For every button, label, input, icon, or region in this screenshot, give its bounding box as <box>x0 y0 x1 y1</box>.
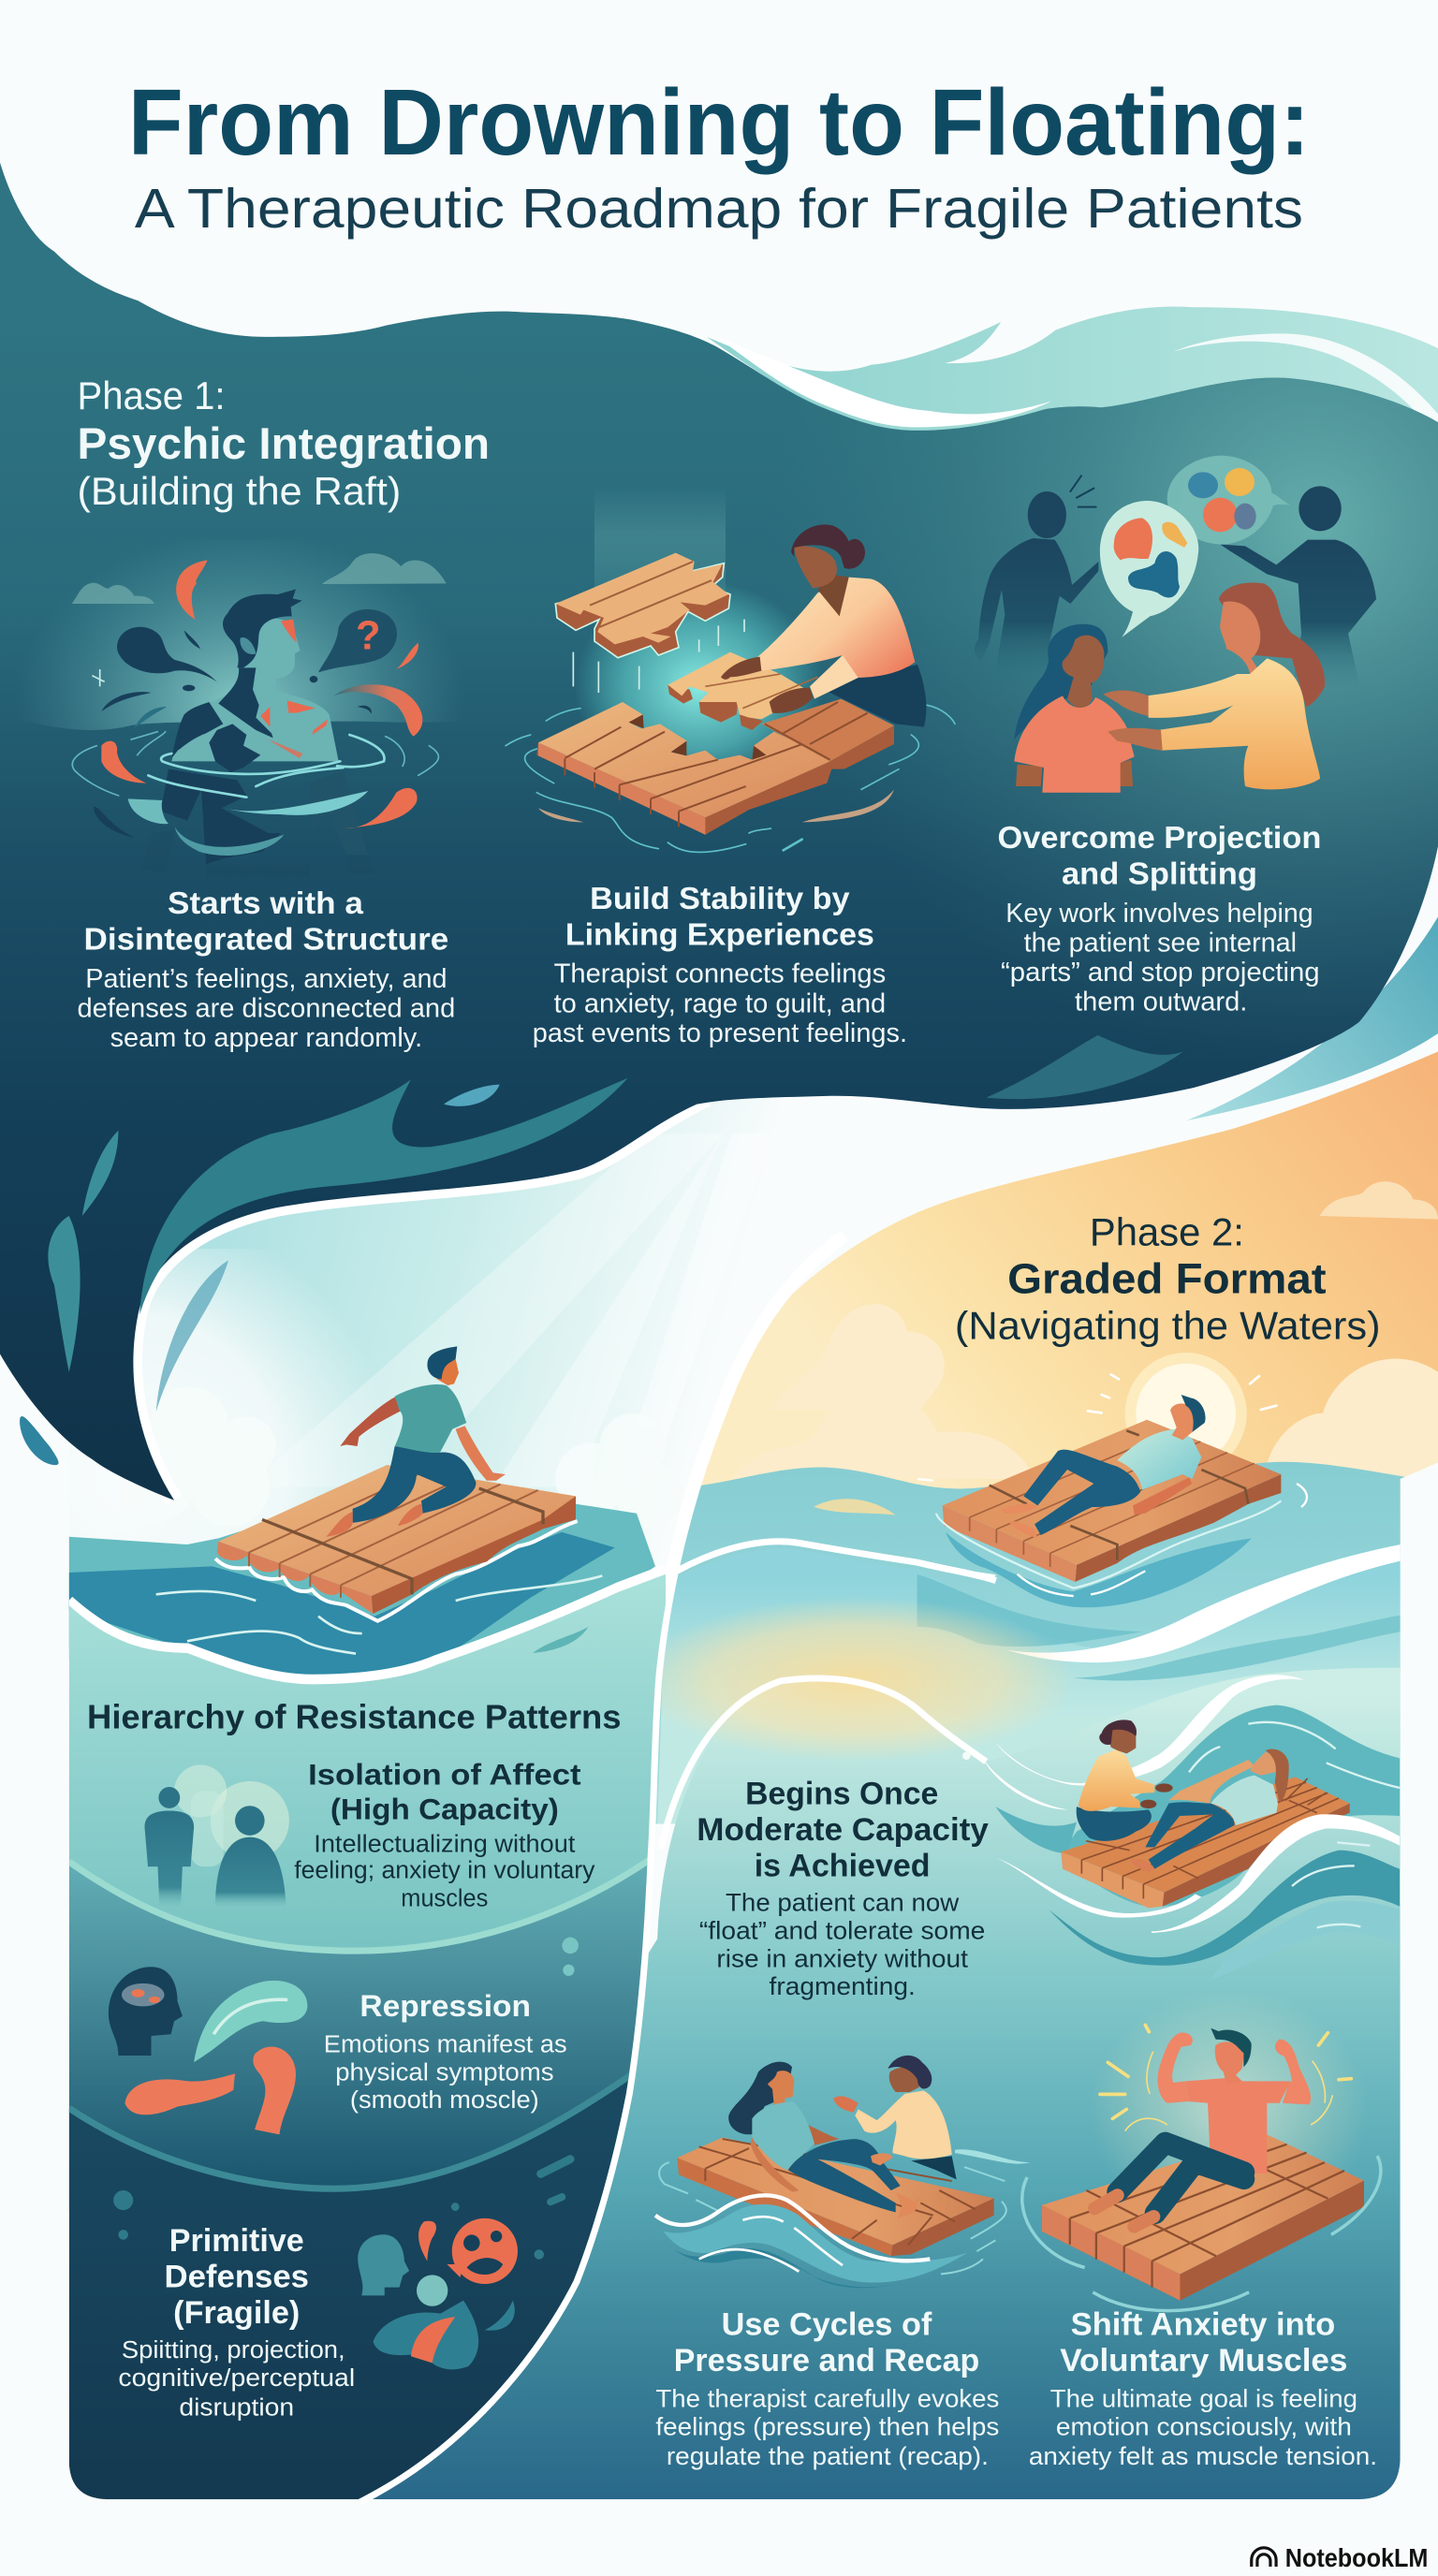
text: cycles of pressure and recap <box>655 2306 999 2470</box>
sound marks <box>1070 476 1096 507</box>
raft front faces <box>217 1542 373 1614</box>
foam <box>936 1500 1281 1588</box>
question bubble <box>318 609 397 672</box>
energy arcs <box>1125 2052 1332 2131</box>
lower white ribbon <box>997 1858 1201 1918</box>
text: begins once moderate capacity: The patient can now <box>726 1888 960 1917</box>
text: cycles of pressure and recap: regulate the patient (recap). <box>667 2441 989 2470</box>
subtitle: A Therapeutic Roadmap for Fragile Patients <box>135 177 1303 240</box>
text: shift anxiety into voluntary muscles <box>1029 2306 1377 2470</box>
tan flecks <box>538 789 894 822</box>
dark blob <box>117 627 217 681</box>
orange shards on shoulder <box>260 700 328 758</box>
left arm <box>340 1397 405 1446</box>
card text: overcome projection: and Splitting <box>1062 856 1257 891</box>
therapist torso <box>1078 1749 1154 1811</box>
divider between columns <box>359 1236 844 2499</box>
icon: fragmented self <box>113 2159 570 2369</box>
right woman top <box>1147 658 1320 789</box>
right silhouette head <box>1299 486 1342 531</box>
text: cycles of pressure and recap: The therapist carefully evokes <box>655 2384 999 2413</box>
card text: disintegrated structure: Patient’s feelings, anxiety, and <box>85 964 447 994</box>
under water torso <box>161 769 281 864</box>
torso <box>757 578 915 686</box>
sparkle <box>92 669 105 686</box>
card text: build stability: Linking Experiences <box>565 917 874 952</box>
lighter teal at the right <box>0 163 1438 1118</box>
blue sky drop <box>156 1260 228 1412</box>
card text: overcome projection: “parts” and stop projecting <box>1001 958 1320 988</box>
orange fragments <box>101 560 422 828</box>
section: isolation of affect: (High Capacity) <box>330 1792 559 1825</box>
feet <box>1000 1504 1037 1538</box>
teal swoosh <box>139 1078 628 1314</box>
right under water arm <box>309 770 368 855</box>
raft top <box>1061 1777 1350 1893</box>
pale crest wave <box>707 307 1438 476</box>
forearm lower <box>810 655 858 699</box>
blue band at right <box>1186 917 1438 1120</box>
sun rays <box>1088 1374 1276 1412</box>
surf in wave <box>1292 1842 1370 1927</box>
plank ends <box>565 759 679 827</box>
trousers <box>353 1446 476 1523</box>
text: cycles of pressure and recap: Pressure and Recap <box>674 2343 979 2378</box>
raft top <box>943 1420 1281 1565</box>
trousers <box>1118 2143 1244 2214</box>
clouds on the horizon <box>825 1181 1438 1479</box>
section: isolation of affect: feeling; anxiety in voluntary <box>294 1855 595 1883</box>
raft front <box>1061 1852 1164 1908</box>
title <box>128 70 1310 240</box>
card text: disintegrated structure <box>78 886 455 1053</box>
ropes <box>990 1430 1248 1560</box>
hand 2 <box>1140 1800 1156 1808</box>
lower pale wave <box>1211 1901 1400 1980</box>
phase 2 heading: (Navigating the Waters) <box>955 1304 1381 1348</box>
card text: overcome projection <box>998 821 1321 1017</box>
ripples <box>659 2162 1006 2274</box>
cloud 2 <box>322 553 447 584</box>
text: shift anxiety into voluntary muscles: emotion consciously, with <box>1056 2412 1352 2441</box>
face <box>1170 1403 1196 1440</box>
section: isolation of affect: muscles <box>401 1883 488 1911</box>
left woman face <box>1063 636 1104 709</box>
face <box>794 546 837 588</box>
upper bubble blobs <box>1188 468 1256 532</box>
section: primitive defenses <box>113 2159 570 2421</box>
therapist hand <box>833 2096 858 2113</box>
arm <box>1133 1477 1192 1515</box>
body base <box>171 619 339 761</box>
floating piece grain <box>590 562 712 627</box>
upper speech bubble <box>1167 456 1290 545</box>
patient torso <box>752 2101 814 2170</box>
card text: overcome projection: Overcome Projection <box>998 821 1321 856</box>
raft front <box>943 1505 1077 1582</box>
notch shadows <box>629 714 766 760</box>
dark wave body <box>0 163 1438 1500</box>
raft right side <box>1075 1474 1281 1582</box>
card text: overcome projection: them outward. <box>1075 988 1247 1017</box>
section: primitive defenses: Spiitting, projection, <box>122 2335 345 2364</box>
water shapes <box>128 791 368 856</box>
hair <box>791 524 865 569</box>
text: shift anxiety into voluntary muscles: The ultimate goal is feeling <box>1050 2384 1357 2413</box>
arms <box>1158 2033 1311 2104</box>
section: repression: Repression <box>360 1989 531 2023</box>
phase 2 heading: Graded Format <box>1007 1255 1327 1303</box>
ripples <box>72 732 438 798</box>
hands <box>721 657 813 713</box>
raft front <box>1042 2205 1180 2301</box>
right silhouette body <box>1220 540 1376 690</box>
feet <box>1094 2195 1153 2227</box>
raft front <box>677 2158 892 2256</box>
chest shard <box>209 724 260 772</box>
section: primitive defenses: Primitive <box>169 2223 304 2259</box>
band below the wave <box>657 1612 1401 1823</box>
big white ribbon <box>1152 1814 1400 1933</box>
hair <box>223 589 302 667</box>
planks <box>1081 1778 1339 1898</box>
left teal drop <box>48 1216 81 1372</box>
raft right side <box>372 1496 576 1614</box>
lower bubble blobs <box>1114 518 1187 597</box>
middle scoop highlight <box>69 1849 666 1951</box>
icon: therapist beside patient on raft <box>962 1663 1400 1980</box>
raft right block sides <box>536 725 894 835</box>
light column <box>594 487 726 618</box>
right woman face <box>1220 602 1260 674</box>
heading: hierarchy of resistance patterns: Hierarchy of Resistance Patterns <box>87 1698 622 1736</box>
left droplet <box>82 1131 118 1216</box>
middle piece sides <box>668 685 763 730</box>
card text: build stability: Therapist connects feelings <box>554 959 886 989</box>
water surface <box>649 1462 1438 1824</box>
plank lines <box>249 1471 538 1598</box>
patient face <box>1250 1752 1283 1776</box>
phase 1 heading: Phase 1: <box>78 373 225 417</box>
foam <box>215 1521 578 1621</box>
sky <box>69 1098 855 1660</box>
blue droplets <box>444 1085 500 1106</box>
white ribbons <box>995 1675 1304 1786</box>
trousers <box>1023 1450 1140 1535</box>
patient feet <box>871 2153 920 2218</box>
card text: overcome projection: Key work involves helping <box>1005 899 1313 929</box>
raft front faces <box>538 742 705 835</box>
glow <box>574 580 824 793</box>
icon: man kneeling on raft <box>217 1346 576 1614</box>
planks <box>699 2139 976 2245</box>
white ribbon lower left <box>983 1758 1067 1809</box>
left woman arms <box>1016 760 1133 786</box>
phase 1 heading: Psychic Integration <box>78 419 490 469</box>
shirt <box>1186 2078 1290 2174</box>
text: begins once moderate capacity: is Achieved <box>755 1849 931 1884</box>
patient face <box>768 2071 794 2104</box>
white haze at lower left <box>0 1249 427 1603</box>
section: repression: physical symptoms <box>335 2057 554 2086</box>
ear shard <box>240 637 256 654</box>
card text: disintegrated structure: seam to appear randomly. <box>110 1023 422 1053</box>
therapist skirt <box>1077 1807 1152 1841</box>
text: cycles of pressure and recap: feelings (pressure) then helps <box>655 2412 999 2441</box>
teal wave <box>1061 1705 1400 1907</box>
icon: man floating on raft <box>917 1353 1307 1607</box>
text: shift anxiety into voluntary muscles: Shift Anxiety into <box>1071 2306 1335 2342</box>
phase 1 heading <box>78 373 490 513</box>
card text: overcome projection: the patient see internal <box>1024 928 1297 958</box>
floating piece sides <box>555 564 730 658</box>
teal left wave <box>995 1807 1077 1853</box>
dark water <box>68 1532 615 1682</box>
surf lines <box>156 1575 602 1654</box>
patient arm behind <box>808 2125 840 2145</box>
middle grain <box>705 674 817 709</box>
crest white ribbon <box>1173 333 1438 440</box>
panel: Phase 1 wave <box>0 163 1438 1500</box>
section: primitive defenses: disruption <box>179 2393 294 2421</box>
white wave line <box>666 1542 996 1581</box>
therapist torso <box>855 2090 952 2159</box>
section: repression <box>109 1938 579 2134</box>
energy marks <box>1100 2025 1351 2118</box>
patient legs <box>788 2139 901 2212</box>
raft right side <box>1163 1804 1350 1907</box>
hands <box>1103 690 1163 751</box>
right arm <box>456 1426 506 1481</box>
panel: raft in the light, left sky <box>0 1098 855 1660</box>
wave reflection at right <box>986 1035 1183 1099</box>
icon: head with gut <box>109 1938 579 2134</box>
card text: build stability: past events to present feelings. <box>533 1018 907 1048</box>
raft right side <box>891 2198 994 2256</box>
outer dark drop <box>20 1416 59 1465</box>
hair <box>1211 2028 1252 2067</box>
upper body, traced <box>1100 2025 1351 2174</box>
neck <box>817 574 849 616</box>
water under raft <box>946 1532 1252 1607</box>
section: isolation of affect <box>144 1757 595 1911</box>
small dark flecks <box>94 630 372 838</box>
icon: projection and splitting figures <box>975 456 1376 793</box>
section: primitive defenses: Defenses <box>165 2260 309 2295</box>
text: shift anxiety into voluntary muscles: Voluntary Muscles <box>1060 2343 1347 2378</box>
patient trousers <box>1145 1802 1235 1869</box>
patient arm <box>751 2137 799 2192</box>
patient foot <box>1130 1859 1154 1872</box>
patient hair <box>728 2062 792 2134</box>
plank lines <box>565 702 868 812</box>
section: repression: (smooth moscle) <box>350 2086 539 2114</box>
text: begins once moderate capacity: fragmenting. <box>770 1971 916 2000</box>
face shard <box>281 620 297 643</box>
text: begins once moderate capacity: Moderate Capacity <box>697 1812 989 1848</box>
question mark: ? <box>356 613 380 658</box>
teal wave <box>663 2204 967 2283</box>
text: cycles of pressure and recap: Use Cycles of <box>722 2306 932 2342</box>
therapist face <box>1107 1728 1136 1753</box>
drips <box>573 620 744 693</box>
white ribbon right <box>1005 1544 1401 1662</box>
section: repression: Emotions manifest as <box>324 2030 567 2058</box>
therapist skirt <box>911 2156 957 2179</box>
card text: build stability: Build Stability by <box>590 882 850 916</box>
water surface <box>69 1503 655 1653</box>
surf strokes <box>1189 1722 1400 1788</box>
feet <box>326 1504 423 1537</box>
top blue ribbon <box>1070 1663 1198 1679</box>
lower scoop <box>69 2073 633 2514</box>
card text: disintegrated structure: Starts with a <box>168 886 363 921</box>
section: isolation of affect: Intellectualizing without <box>314 1829 576 1857</box>
section: primitive defenses: (Fragile) <box>173 2295 300 2331</box>
large lower water <box>296 1668 1401 2514</box>
planks <box>1070 2144 1344 2288</box>
left woman top <box>1014 695 1135 793</box>
dark wave <box>1049 1851 1400 1966</box>
soft wave tints <box>814 1499 896 1515</box>
card text: disintegrated structure: defenses are disconnected and <box>78 994 455 1024</box>
patient hair <box>1266 1749 1289 1804</box>
face <box>1215 2042 1243 2085</box>
sun <box>1125 1353 1247 1474</box>
clouds <box>72 583 154 604</box>
left silhouette head <box>1028 491 1066 538</box>
left woman hair <box>1014 624 1108 739</box>
face <box>433 1359 459 1385</box>
phase 1 heading: (Building the Raft) <box>78 469 401 513</box>
icon: pressure and recap raft <box>655 2056 1030 2288</box>
shoulder shard <box>171 702 223 758</box>
glow <box>1090 1988 1369 2234</box>
text: begins once moderate capacity <box>697 1776 989 2000</box>
left water, traced <box>68 1486 655 1682</box>
therapist hair <box>888 2056 932 2088</box>
raft top <box>218 1465 576 1596</box>
raft left block top <box>538 702 830 817</box>
icon: figures <box>144 1764 289 1906</box>
raft right block top <box>761 699 894 761</box>
phase 2 heading: Phase 2: <box>1090 1210 1244 1254</box>
raft sides <box>1042 2180 1364 2301</box>
patient torso <box>1211 1776 1278 1825</box>
surf <box>699 2217 843 2272</box>
floating piece top <box>555 553 728 644</box>
shirt <box>395 1384 466 1453</box>
text: begins once moderate capacity: “float” and tolerate some <box>699 1915 985 1944</box>
blue ribbon under raft 1 <box>917 1574 1142 1647</box>
planks <box>970 1430 1255 1567</box>
text: shift anxiety into voluntary muscles: anxiety felt as muscle tension. <box>1029 2441 1377 2470</box>
section: isolation of affect: Isolation of Affect <box>308 1757 581 1791</box>
right woman hair <box>1219 583 1325 707</box>
panel: hierarchy background <box>68 1486 666 2514</box>
white outline of lower dark edge <box>133 1098 707 1500</box>
lower band fill under crest <box>69 1574 666 1951</box>
raft top <box>677 2137 994 2245</box>
therapist skirt <box>817 665 926 727</box>
section: primitive defenses: cognitive/perceptual <box>118 2364 355 2392</box>
white crest line <box>69 1569 666 1679</box>
white ribbon along crest <box>716 337 1051 427</box>
ripples <box>1022 2156 1381 2311</box>
shirt <box>1117 1429 1201 1490</box>
therapist hair <box>1099 1720 1137 1745</box>
lower legs <box>140 830 374 877</box>
sun core <box>1136 1364 1236 1463</box>
small teal fleck <box>533 1627 588 1653</box>
text: begins once moderate capacity: rise in anxiety without <box>716 1943 968 1972</box>
yellow reflection <box>661 1601 1061 1754</box>
ropes <box>262 1488 543 1594</box>
light rays <box>246 1134 772 1487</box>
left silhouette body <box>975 538 1098 690</box>
middle piece top <box>668 652 812 719</box>
therapist hands <box>1155 1783 1173 1793</box>
phase 2 heading <box>955 1210 1381 1348</box>
white crest <box>655 2195 930 2261</box>
lower scoop highlight <box>69 2073 633 2188</box>
therapist face <box>889 2068 919 2092</box>
dark under-wave <box>674 2248 899 2288</box>
water lines <box>506 705 955 852</box>
clouds <box>95 1387 682 1529</box>
hair <box>427 1346 457 1379</box>
main title: From Drowning to Floating: <box>128 70 1310 175</box>
surf <box>917 1479 1307 1596</box>
board by head <box>1168 1760 1255 1804</box>
mist glow above horizon <box>41 554 439 730</box>
text: begins once moderate capacity: Begins Once <box>745 1776 938 1811</box>
card text: build stability <box>533 882 907 1048</box>
icon: woman building puzzle raft <box>506 487 955 852</box>
blue ribbon right <box>1073 1616 1401 1680</box>
orange sky <box>649 1035 1438 1544</box>
dot <box>962 1751 971 1760</box>
middle scoop <box>69 1849 666 2210</box>
ripple right <box>955 2149 1030 2164</box>
card text: build stability: to anxiety, rage to guilt, and <box>554 988 886 1018</box>
icon: disintegrated man <box>16 531 465 880</box>
raft top <box>1042 2134 1364 2275</box>
neck and back shard <box>218 667 273 738</box>
icon: logo arcs <box>1252 2548 1276 2567</box>
panel: phase 2 background <box>296 1035 1438 2514</box>
icon: man flexing on raft <box>1022 1988 1381 2311</box>
lower speech bubble <box>1100 501 1198 637</box>
card text: disintegrated structure: Disintegrated Structure <box>84 923 448 958</box>
hair <box>1181 1395 1206 1432</box>
white crest of lower water <box>664 1676 989 1823</box>
